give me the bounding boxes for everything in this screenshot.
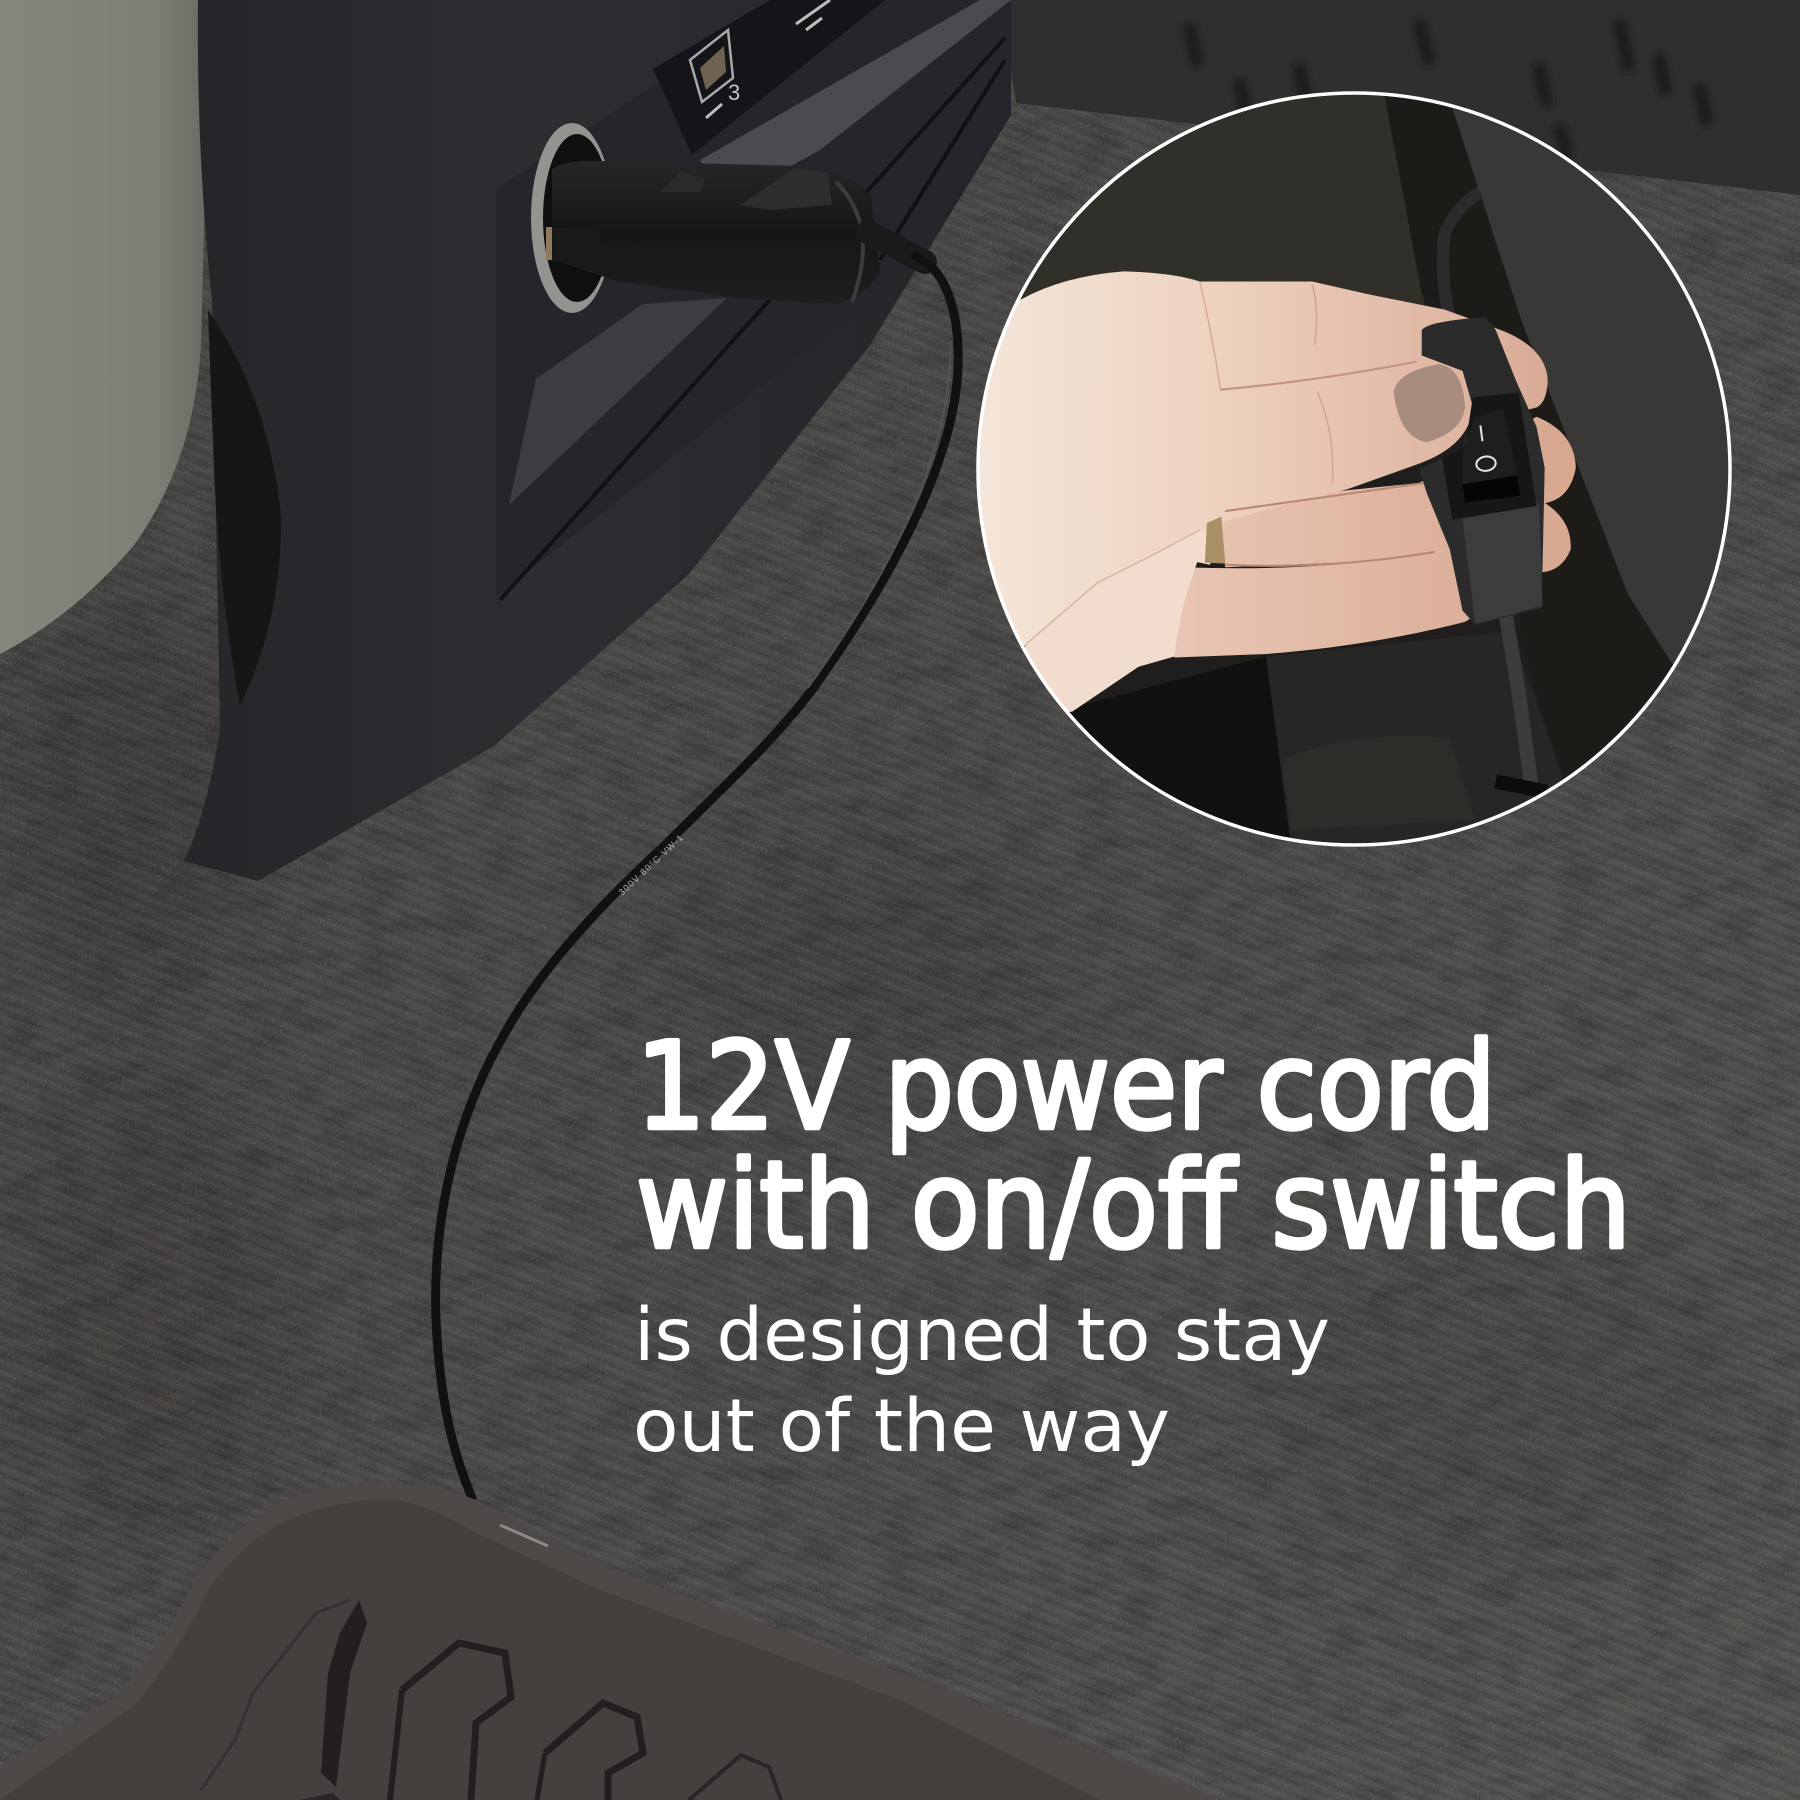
passenger seat side [0, 0, 204, 654]
heading: with on/off switch [636, 1137, 1631, 1276]
USB port strip: 3 [728, 80, 740, 105]
inset car interior background [1020, 96, 1728, 844]
pinky mound [1024, 522, 1222, 712]
palm and index finger [980, 271, 1548, 646]
console socket panel [496, 0, 1011, 600]
heading: 12V power cord [636, 1018, 1496, 1157]
subheading [633, 1293, 1330, 1469]
12V plug [552, 161, 925, 304]
subheading: out of the way [633, 1384, 1170, 1469]
thumbnail [1394, 364, 1465, 442]
on/off rocker switch [1419, 317, 1545, 625]
USB port strip [653, 0, 885, 155]
12V socket ring [531, 123, 613, 313]
console side vent slit [208, 310, 281, 705]
rear floor mat, top right [1000, 0, 1800, 195]
heading [636, 1018, 1631, 1276]
lower fingers [1171, 417, 1576, 658]
floor mat, bottom [0, 1483, 1217, 1800]
subheading: is designed to stay [634, 1293, 1330, 1378]
thumb [1026, 282, 1473, 644]
cord print: 300V 80°C VW-1 [617, 832, 686, 897]
inset circle white border [978, 93, 1730, 845]
center console [184, 0, 1011, 881]
mat tread grooves [201, 1600, 781, 1800]
wedding ring [1205, 517, 1225, 564]
power cord [436, 256, 958, 1498]
switch cable [1443, 192, 1547, 792]
inset circle photo: hand pressing switch [980, 96, 1728, 844]
